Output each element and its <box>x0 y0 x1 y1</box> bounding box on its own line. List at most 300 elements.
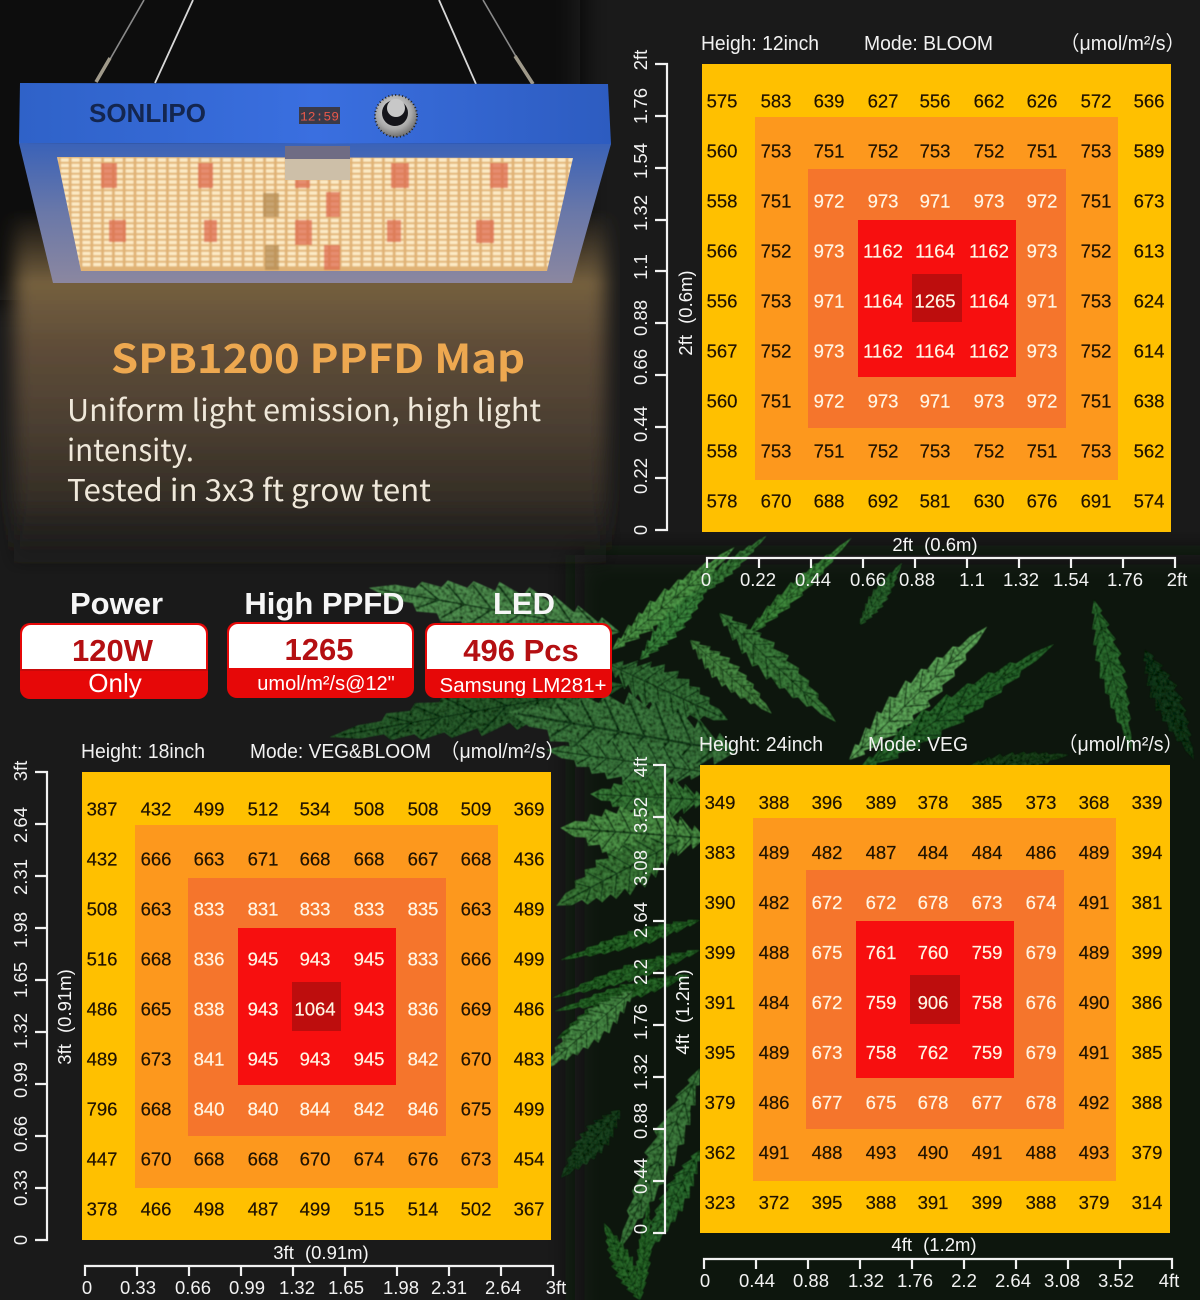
heatmap values: 556 <box>920 90 950 112</box>
heatmap values: 758 <box>866 1042 896 1063</box>
heatmap values: 943 <box>300 948 330 970</box>
horizontal axis: 4ft <box>1159 1270 1179 1291</box>
heatmap values: 752 <box>1081 240 1111 262</box>
heatmap values: 679 <box>1026 1042 1056 1063</box>
vertical axis: 2.31 <box>10 859 31 895</box>
heatmap values: 751 <box>1081 390 1111 412</box>
heatmap values: 846 <box>408 1098 438 1120</box>
vertical axis <box>630 757 665 1234</box>
heatmap values: 1162 <box>969 240 1009 262</box>
horizontal axis: 1.54 <box>1053 569 1089 590</box>
heatmap values: 314 <box>1132 1192 1162 1213</box>
heatmap values: 972 <box>814 190 844 212</box>
heatmap values: 675 <box>866 1092 896 1113</box>
map header: （μmol/m²/s） <box>1060 32 1185 55</box>
heatmap values: 575 <box>707 90 737 112</box>
horizontal axis: 0.88 <box>899 569 935 590</box>
horizontal axis: 0.88 <box>793 1270 829 1291</box>
heatmap values: 836 <box>408 998 438 1020</box>
heatmap values: 668 <box>141 1098 171 1120</box>
heatmap values: 383 <box>705 842 735 863</box>
heatmap values: 753 <box>1081 140 1111 162</box>
map header: Mode: VEG&BLOOM <box>250 741 431 763</box>
heatmap values <box>707 90 1164 512</box>
heatmap values: 753 <box>761 290 791 312</box>
heatmap values: 508 <box>354 798 384 820</box>
heatmap values: 489 <box>514 898 544 920</box>
heatmap values: 691 <box>1081 490 1111 512</box>
heatmap values: 943 <box>300 1048 330 1070</box>
heatmap values: 668 <box>300 848 330 870</box>
heatmap values: 973 <box>868 190 898 212</box>
heatmap values: 486 <box>759 1092 789 1113</box>
map header <box>81 740 565 763</box>
heatmap values: 385 <box>972 792 1002 813</box>
horizontal axis: 1.32 <box>848 1270 884 1291</box>
heatmap values: 1162 <box>863 240 903 262</box>
heatmap values: 391 <box>918 1192 948 1213</box>
dark top left background <box>0 0 580 300</box>
heatmap values: 972 <box>814 390 844 412</box>
heatmap values: 945 <box>354 1048 384 1070</box>
heatmap values: 761 <box>866 942 896 963</box>
heatmap values: 614 <box>1134 340 1164 362</box>
vertical axis: 2.64 <box>630 902 651 938</box>
heatmap values: 752 <box>974 440 1004 462</box>
heatmap values: 558 <box>707 190 737 212</box>
heatmap values: 432 <box>141 798 171 820</box>
heatmap values: 589 <box>1134 140 1164 162</box>
LED board <box>57 157 573 271</box>
heatmap values: 676 <box>1027 490 1057 512</box>
heatmap values: 751 <box>814 440 844 462</box>
background cannabis leaves <box>325 530 1200 1300</box>
dark mask behind top-right map <box>620 0 1200 532</box>
vertical axis: 1.32 <box>630 195 651 231</box>
heatmap values: 677 <box>972 1092 1002 1113</box>
heatmap values: 751 <box>761 190 791 212</box>
heatmap values: 487 <box>866 842 896 863</box>
heatmap values: 753 <box>1081 440 1111 462</box>
heatmap values: 668 <box>141 948 171 970</box>
heatmap values: 578 <box>707 490 737 512</box>
vertical axis <box>10 761 47 1245</box>
heatmap rings <box>702 64 1171 532</box>
heatmap values: 753 <box>920 440 950 462</box>
map header: Height: 18inch <box>81 741 205 763</box>
heatmap values: 842 <box>408 1048 438 1070</box>
heatmap values: 666 <box>141 848 171 870</box>
vertical axis label: 4ft (1.2m) <box>672 969 693 1055</box>
heatmap values: 493 <box>1079 1142 1109 1163</box>
heatmap values: 842 <box>354 1098 384 1120</box>
heatmap values: 388 <box>1132 1092 1162 1113</box>
heatmap values: 973 <box>1027 340 1057 362</box>
heatmap values: 498 <box>194 1198 224 1220</box>
horizontal axis: 3.52 <box>1098 1270 1134 1291</box>
vertical axis <box>630 50 667 535</box>
horizontal axis: 2.2 <box>951 1270 977 1291</box>
vertical axis label: 3ft (0.91m) <box>54 969 75 1065</box>
horizontal axis: 0.99 <box>229 1277 265 1298</box>
map header <box>701 32 1185 55</box>
heatmap values: 838 <box>194 998 224 1020</box>
heatmap values: 751 <box>814 140 844 162</box>
heatmap values: 945 <box>248 1048 278 1070</box>
heatmap values: 379 <box>1079 1192 1109 1213</box>
heatmap values: 668 <box>248 1148 278 1170</box>
heatmap values: 663 <box>194 848 224 870</box>
horizontal axis: 0.44 <box>739 1270 775 1291</box>
heatmap values: 1164 <box>863 290 903 312</box>
heatmap values: 499 <box>514 1098 544 1120</box>
heatmap values: 583 <box>761 90 791 112</box>
card: 120W only: Only <box>88 668 142 698</box>
heatmap values: 678 <box>1026 1092 1056 1113</box>
vertical axis: 1.76 <box>630 1004 651 1040</box>
heatmap values: 835 <box>408 898 438 920</box>
heatmap values: 753 <box>761 440 791 462</box>
heatmap values: 389 <box>866 792 896 813</box>
heatmap values: 833 <box>300 898 330 920</box>
vertical axis: 0 <box>630 1224 651 1234</box>
heatmap values: 390 <box>705 892 735 913</box>
heatmap values: 665 <box>141 998 171 1020</box>
panel: 18 inch veg and bloom map <box>10 740 566 1298</box>
heatmap values: 488 <box>812 1142 842 1163</box>
heatmap values: 692 <box>868 490 898 512</box>
icon: LED grow light fixture <box>19 83 611 283</box>
heatmap values: 394 <box>1132 842 1162 863</box>
heatmap values: 753 <box>920 140 950 162</box>
heatmap values: 490 <box>1079 992 1109 1013</box>
heatmap values: 483 <box>514 1048 544 1070</box>
vertical axis: 0.66 <box>630 349 651 385</box>
heatmap values: 973 <box>868 390 898 412</box>
heatmap values: 831 <box>248 898 278 920</box>
vertical axis: 1.54 <box>630 143 651 179</box>
heatmap values: 673 <box>1134 190 1164 212</box>
horizontal axis: 0.66 <box>175 1277 211 1298</box>
heatmap values: 388 <box>759 792 789 813</box>
heatmap values: 489 <box>87 1048 117 1070</box>
card: 1265: umol/m²/s@12" <box>257 673 395 695</box>
heatmap values: 673 <box>812 1042 842 1063</box>
heatmap values: 760 <box>918 942 948 963</box>
vertical axis: 3.52 <box>630 797 651 833</box>
horizontal axis <box>701 558 1187 590</box>
heatmap values: 499 <box>300 1198 330 1220</box>
heatmap values: 339 <box>1132 792 1162 813</box>
heatmap values: 323 <box>705 1192 735 1213</box>
heatmap values: 973 <box>974 390 1004 412</box>
vertical axis: 0 <box>10 1235 31 1245</box>
vertical axis: 0 <box>630 525 651 535</box>
heatmap values: 388 <box>866 1192 896 1213</box>
bracket <box>285 146 350 180</box>
heatmap values: 752 <box>1081 340 1111 362</box>
heatmap values: 484 <box>759 992 789 1013</box>
heatmap values: 752 <box>761 240 791 262</box>
heatmap values: 833 <box>354 898 384 920</box>
heatmap values: 945 <box>248 948 278 970</box>
description text: intensity. <box>67 426 194 470</box>
heatmap values: 493 <box>866 1142 896 1163</box>
card: 120W only <box>20 623 208 699</box>
heatmap values: 491 <box>1079 1042 1109 1063</box>
horizontal axis: 1.32 <box>279 1277 315 1298</box>
heatmap values: 673 <box>461 1148 491 1170</box>
heatmap values: 666 <box>461 948 491 970</box>
vertical axis: 3ft <box>10 761 31 781</box>
heatmap values <box>705 792 1162 1213</box>
fixture lower body <box>19 143 611 283</box>
heatmap values: 673 <box>972 892 1002 913</box>
horizontal axis: 1.65 <box>328 1277 364 1298</box>
heatmap values: 499 <box>514 948 544 970</box>
heatmap values: 1162 <box>969 340 1009 362</box>
heatmap values <box>87 798 544 1220</box>
heatmap values: 454 <box>514 1148 544 1170</box>
dark leaf backdrop <box>575 555 1200 1300</box>
heatmap values: 516 <box>87 948 117 970</box>
callout: LED <box>425 586 612 698</box>
fixture top band <box>19 83 611 144</box>
map header: Height: 24inch <box>699 734 823 756</box>
heatmap values: 379 <box>705 1092 735 1113</box>
heatmap values: 391 <box>705 992 735 1013</box>
heatmap values: 971 <box>920 390 950 412</box>
heatmap rings <box>82 772 551 1240</box>
map header: （μmol/m²/s） <box>440 740 565 763</box>
horizontal axis label: 2ft (0.6m) <box>892 534 978 555</box>
heatmap values: 385 <box>1132 1042 1162 1063</box>
heatmap values: 488 <box>759 942 789 963</box>
heatmap values: 362 <box>705 1142 735 1163</box>
horizontal axis <box>82 1266 566 1298</box>
light glow below fixture <box>14 210 606 575</box>
heatmap values: 675 <box>812 942 842 963</box>
heatmap values: 759 <box>972 942 1002 963</box>
heatmap values: 491 <box>1079 892 1109 913</box>
heatmap values: 678 <box>918 1092 948 1113</box>
heatmap values: 752 <box>868 140 898 162</box>
heatmap values: 1265 <box>914 290 956 312</box>
horizontal axis: 2.31 <box>431 1277 467 1298</box>
heatmap values: 674 <box>354 1148 384 1170</box>
vertical axis: 0.44 <box>630 1158 651 1194</box>
horizontal axis: 3.08 <box>1044 1270 1080 1291</box>
heatmap values: 663 <box>461 898 491 920</box>
heading: power: Power <box>70 586 163 621</box>
heatmap values: 432 <box>87 848 117 870</box>
heatmap values: 486 <box>514 998 544 1020</box>
heatmap values: 613 <box>1134 240 1164 262</box>
heatmap values: 399 <box>705 942 735 963</box>
heatmap values: 759 <box>866 992 896 1013</box>
heatmap values: 676 <box>1026 992 1056 1013</box>
heatmap values: 515 <box>354 1198 384 1220</box>
heatmap values: 378 <box>918 792 948 813</box>
digital display: 12:59 <box>300 110 339 124</box>
heatmap values: 489 <box>1079 942 1109 963</box>
card: 1265: 1265 <box>285 632 353 667</box>
map header: Mode: BLOOM <box>864 33 993 55</box>
heatmap values: 836 <box>194 948 224 970</box>
heatmap values: 484 <box>918 842 948 863</box>
heading: LED: LED <box>493 586 555 621</box>
horizontal axis: 3ft <box>546 1277 566 1298</box>
horizontal axis: 0 <box>82 1277 92 1298</box>
heatmap values: 1162 <box>863 340 903 362</box>
heatmap values: 567 <box>707 340 737 362</box>
heatmap values: 673 <box>141 1048 171 1070</box>
heatmap values: 758 <box>972 992 1002 1013</box>
heatmap values: 1164 <box>969 290 1009 312</box>
heatmap values: 378 <box>87 1198 117 1220</box>
heatmap values: 499 <box>194 798 224 820</box>
heatmap values: 512 <box>248 798 278 820</box>
heatmap values: 943 <box>354 998 384 1020</box>
heatmap values: 676 <box>408 1148 438 1170</box>
heatmap values: 663 <box>141 898 171 920</box>
heatmap values: 349 <box>705 792 735 813</box>
heatmap values: 395 <box>812 1192 842 1213</box>
heatmap values: 762 <box>918 1042 948 1063</box>
heatmap values: 627 <box>868 90 898 112</box>
vertical axis: 1.98 <box>10 912 31 948</box>
horizontal axis: 1.98 <box>383 1277 419 1298</box>
card: 496 pcs: Samsung LM281+ <box>440 674 606 697</box>
callout: high PPFD <box>227 586 414 698</box>
heatmap values: 379 <box>1132 1142 1162 1163</box>
vertical axis: 0.99 <box>10 1062 31 1098</box>
heatmap values: 492 <box>1079 1092 1109 1113</box>
heatmap values: 489 <box>759 1042 789 1063</box>
heatmap values: 581 <box>920 490 950 512</box>
heatmap values: 971 <box>814 290 844 312</box>
heatmap values: 372 <box>759 1192 789 1213</box>
heatmap values: 672 <box>812 992 842 1013</box>
heatmap values: 943 <box>248 998 278 1020</box>
vertical axis: 1.32 <box>10 1013 31 1049</box>
map header <box>699 733 1183 756</box>
heatmap values: 751 <box>1027 140 1057 162</box>
horizontal axis: 0 <box>700 1270 710 1291</box>
horizontal axis: 1.1 <box>959 569 985 590</box>
heatmap values: 630 <box>974 490 1004 512</box>
horizontal axis label: 3ft (0.91m) <box>273 1242 369 1263</box>
heatmap values: 972 <box>1027 390 1057 412</box>
panel: 24 inch veg map <box>630 733 1183 1291</box>
heatmap values: 399 <box>1132 942 1162 963</box>
heatmap values: 972 <box>1027 190 1057 212</box>
vertical axis: 1.32 <box>630 1054 651 1090</box>
heatmap values: 672 <box>812 892 842 913</box>
vertical axis: 3.08 <box>630 850 651 886</box>
heatmap values: 670 <box>300 1148 330 1170</box>
heatmap values: 752 <box>974 140 1004 162</box>
heatmap values: 668 <box>461 848 491 870</box>
heatmap values: 488 <box>1026 1142 1056 1163</box>
heatmap values: 486 <box>87 998 117 1020</box>
description text <box>67 386 541 510</box>
heatmap values: 396 <box>812 792 842 813</box>
heatmap values: 558 <box>707 440 737 462</box>
heatmap values: 574 <box>1134 490 1164 512</box>
heatmap values: 436 <box>514 848 544 870</box>
heatmap values: 560 <box>707 390 737 412</box>
heatmap values: 489 <box>759 842 789 863</box>
heatmap values: 572 <box>1081 90 1111 112</box>
callout: power <box>20 586 208 699</box>
heatmap values: 668 <box>194 1148 224 1170</box>
card: 120W only: 120W <box>72 633 154 668</box>
heatmap values: 759 <box>972 1042 1002 1063</box>
heatmap values: 674 <box>1026 892 1056 913</box>
heatmap values: 688 <box>814 490 844 512</box>
heatmap values: 668 <box>354 848 384 870</box>
map header: Heigh: 12inch <box>701 33 819 55</box>
horizontal axis: 2.64 <box>995 1270 1031 1291</box>
heatmap values: 514 <box>408 1198 438 1220</box>
card: 1265 <box>227 622 414 698</box>
vertical axis: 1.76 <box>630 88 651 124</box>
heatmap values: 751 <box>1027 440 1057 462</box>
heatmap values: 562 <box>1134 440 1164 462</box>
horizontal axis: 0.22 <box>740 569 776 590</box>
heatmap values: 491 <box>972 1142 1002 1163</box>
heatmap values: 367 <box>514 1198 544 1220</box>
vertical axis: 0.33 <box>10 1170 31 1206</box>
icon: hanging cables <box>96 0 533 84</box>
heatmap values: 1064 <box>294 998 336 1020</box>
title: SPB1200 PPFD Map <box>111 327 525 385</box>
map header: Mode: VEG <box>868 734 968 756</box>
heatmap values: 487 <box>248 1198 278 1220</box>
heading: high PPFD: High PPFD <box>244 586 405 621</box>
icon: dimmer knob <box>375 95 417 137</box>
heatmap values: 833 <box>194 898 224 920</box>
heatmap values: 486 <box>1026 842 1056 863</box>
horizontal axis: 0.66 <box>850 569 886 590</box>
heatmap values: 670 <box>461 1048 491 1070</box>
heatmap values: 841 <box>194 1048 224 1070</box>
heatmap values: 752 <box>868 440 898 462</box>
heatmap values: 844 <box>300 1098 330 1120</box>
heatmap values: 973 <box>814 240 844 262</box>
horizontal axis <box>700 1259 1179 1291</box>
heatmap values: 534 <box>300 798 330 820</box>
heatmap values: 626 <box>1027 90 1057 112</box>
heatmap values: 387 <box>87 798 117 820</box>
heatmap values: 679 <box>1026 942 1056 963</box>
heatmap values: 796 <box>87 1098 117 1120</box>
vertical axis: 0.66 <box>10 1116 31 1152</box>
heatmap values: 482 <box>812 842 842 863</box>
heatmap values: 566 <box>707 240 737 262</box>
heatmap values: 1164 <box>915 340 955 362</box>
heatmap rings <box>700 765 1170 1233</box>
heatmap values: 672 <box>866 892 896 913</box>
card: 496 pcs <box>425 623 612 698</box>
vertical axis: 0.88 <box>630 1103 651 1139</box>
heatmap values: 678 <box>918 892 948 913</box>
heatmap values: 395 <box>705 1042 735 1063</box>
heatmap values: 386 <box>1132 992 1162 1013</box>
heatmap values: 508 <box>408 798 438 820</box>
heatmap values: 556 <box>707 290 737 312</box>
